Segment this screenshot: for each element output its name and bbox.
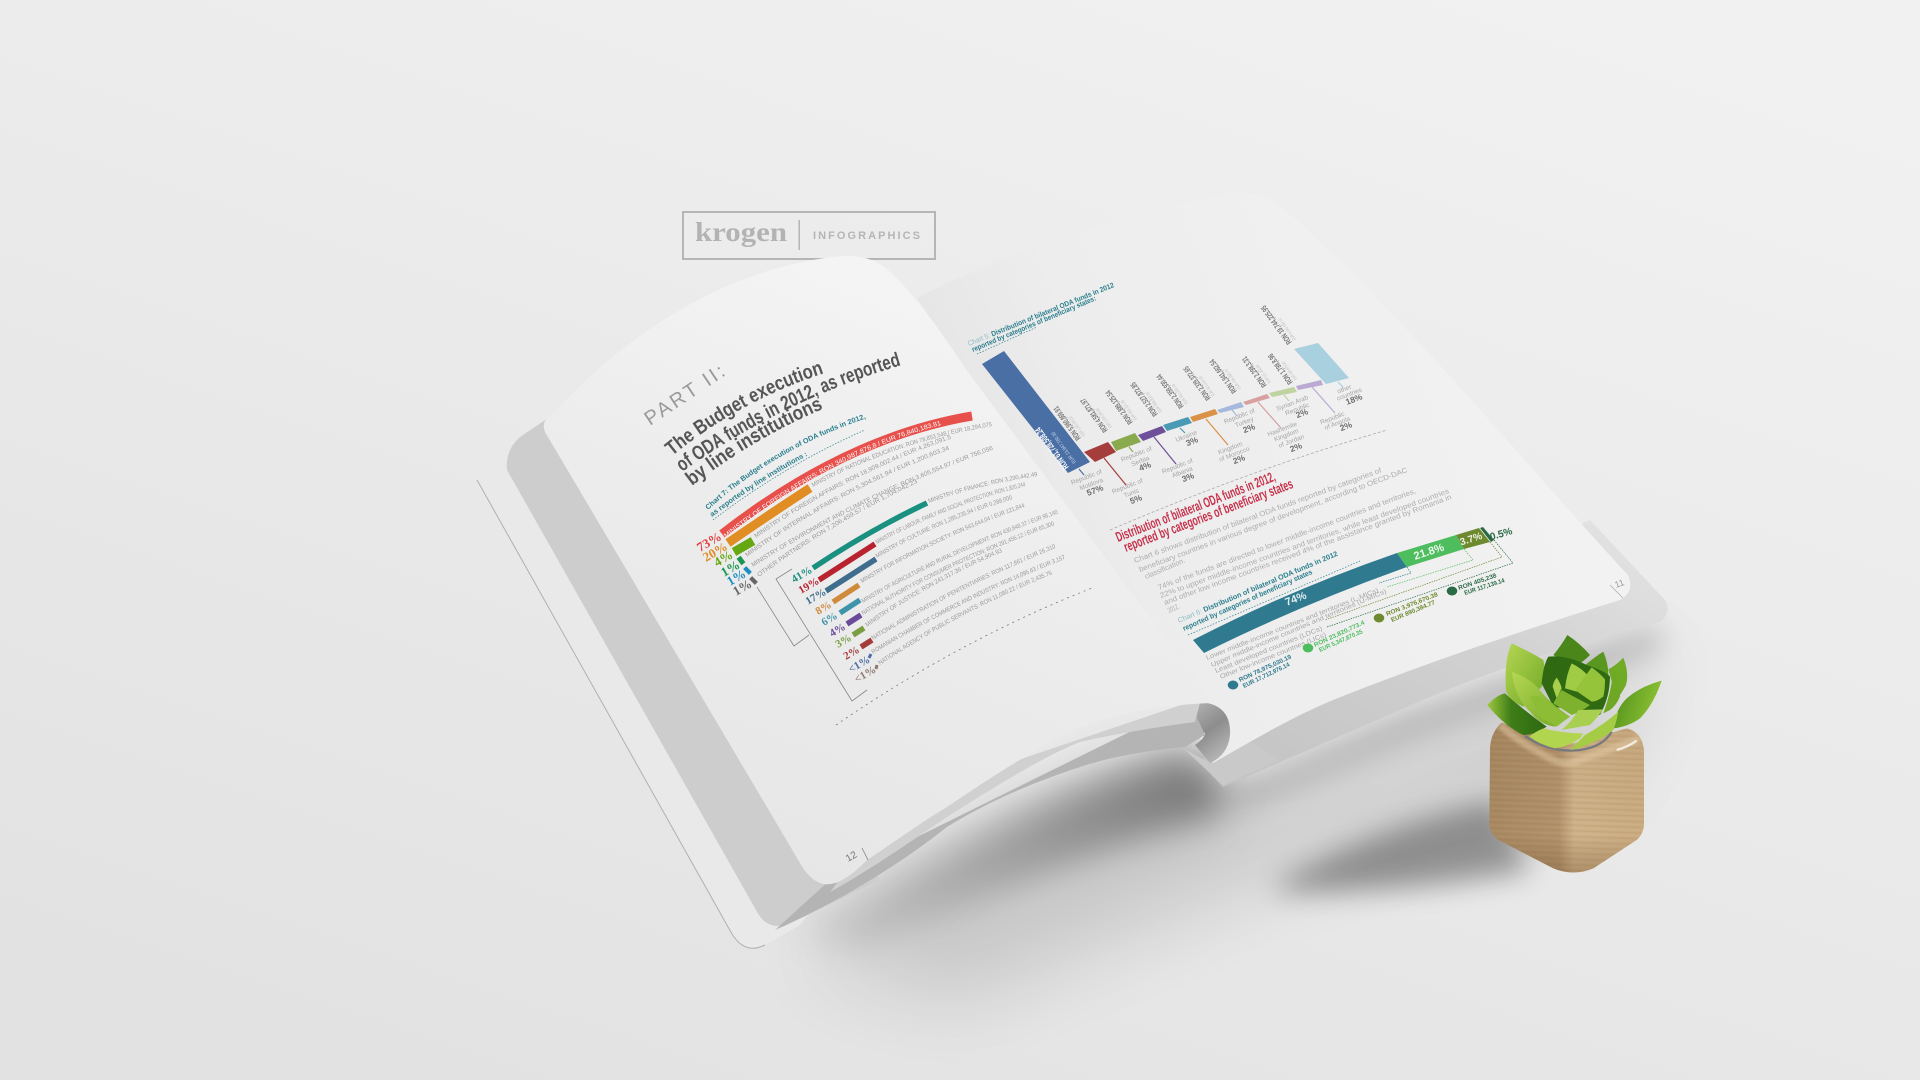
stepped country bar chart: EUR 650,114.30 [1119, 399, 1138, 421]
chart 7 upper bars: 1% [724, 566, 748, 589]
chart 7 caption: as reported by line institutions : [710, 452, 808, 516]
chart 7 upper bars: MINISTRY OF INTERNAL AFFAIRS: RON 5,304,561.94 / EUR 1,200,603.34 [745, 446, 949, 556]
chart 7 lower bars: MINISTRY OF FINANCE: RON 3,290,442.49 [928, 472, 1037, 503]
stepped country bar chart: of Jordan [1278, 433, 1306, 450]
chart 7 upper bars: 20% [700, 539, 730, 565]
body text: and other low income countries received 4% of the assistance granted by Romania in [1163, 492, 1453, 607]
chart 7 upper bars: MINISTRY OF FOREIGN AFFAIRS: RON 18,909,002.44 / EUR 4,263,091.5 [754, 434, 951, 538]
pot [1489, 723, 1644, 872]
chart 7 lower bars: MINISTRY OF JUSTICE: RON 241,317.36 / EUR 54,904.93 [865, 548, 1002, 627]
main heading: by line institutions [684, 400, 822, 486]
logo: krogen infographics [683, 212, 935, 259]
stepped country bar chart [982, 303, 1364, 506]
chart 5 caption: Chart 5: Distribution of bilateral ODA funds in 2012 [966, 280, 1115, 348]
body text: 22% to upper middle-income countries and territories, while least developed countries [1159, 486, 1450, 600]
stepped country bar chart: EUR 1,030,225.60 [1094, 407, 1113, 429]
stepped country bar chart: RON 2,527,872.85 [1129, 380, 1160, 418]
page block right [1200, 520, 1668, 787]
chart 7 upper bars [694, 412, 993, 599]
body text [1133, 465, 1453, 615]
gutter curl [1150, 702, 1230, 763]
stepped country bar chart: of Angola [1324, 415, 1352, 432]
chart 6 stacked bar: Chart 6: Distribution of bilateral ODA funds in 2012 [1176, 549, 1339, 625]
soil ring [1525, 732, 1612, 751]
stepped country bar chart: 2% [1338, 419, 1354, 433]
chart 6 stacked bar: reported by categories of beneficiary states [1181, 567, 1314, 633]
book shadow [790, 625, 1660, 1000]
underside pages light strip [830, 702, 1200, 892]
chart 7 caption: Chart 7: The Budget execution of ODA funds in 2012, [706, 414, 866, 509]
stepped country bar chart: EUR 13,847,760.30 [1050, 430, 1078, 464]
chart 7 upper bars: MINISTRY OF ENVIRONMENT AND CLIMATE CHANGE: RON 3,605,554.97 / EUR 756,056 [751, 446, 993, 567]
page block left [507, 410, 880, 926]
stepped country bar chart: 2% [1231, 452, 1247, 466]
page number 11: 11 [1613, 577, 1625, 590]
stepped country bar chart: EUR 524,110.20 [1197, 375, 1216, 397]
chart 7 upper bars: MINISTRY OF FOREIGN AFFAIRS: RON 340,987,876.8 / EUR 76,840,183.81 [724, 421, 941, 538]
stepped country bar chart: other [1336, 383, 1353, 396]
chart 7 brackets [757, 569, 867, 701]
chart 6 legend: EUR 117,139.14 [1463, 577, 1506, 597]
stepped country bar chart: RON 2,889,125.54 [1104, 388, 1135, 426]
chart 6 stacked bar [1176, 526, 1514, 653]
body text: 2012. [1166, 602, 1181, 615]
back cover [477, 447, 900, 948]
body text: Chart 6 shows distribution of bilateral ODA funds reported by categories of [1133, 465, 1383, 565]
chart 7 lower bars: <1% [852, 664, 878, 686]
stepped country bar chart: Republic [1284, 402, 1311, 417]
chart 7 upper bars: OTHER PARTNERS: RON 7,206,459.57 / EUR 1,704,042.23 [758, 479, 918, 576]
page number 12: 12 [844, 849, 860, 865]
chart 7 lower bars: MINISTRY OF AGRICULTURE AND RURAL DEVELOPMENT: RON 430,648.37 / EUR 96,140 [861, 510, 1058, 603]
stepped country bar chart: Kingdom [1273, 428, 1300, 443]
chart 6 legend: RON 23,820,773.4 [1313, 619, 1366, 649]
stepped country bar chart: Turkey [1234, 416, 1256, 429]
chart 5 caption: reported by categories of beneficiary states: [970, 294, 1097, 354]
chart 7 lower bars: 8% [814, 599, 834, 618]
chart 6 stacked bar: 21.8% [1412, 542, 1446, 563]
chart 7 lower bars: MINISTRY OF CULTURE: RON 1,285,235.94 / EUR 0,288,000 [875, 495, 1012, 558]
red heading: Distribution of bilateral ODA funds in 2012, [1113, 468, 1277, 545]
chart 6 legend: Lower middle-income countries and territories (L-MICs) [1205, 587, 1380, 662]
chart 7 upper bars: MINISTRY OF NATIONAL EDUCATION: RON 78,853,548 / EUR 18,294,075 [812, 422, 992, 487]
chart 6 legend: EUR 890,384.77 [1390, 599, 1437, 624]
stepped country bar chart: EUR 568,920.10 [1144, 391, 1163, 413]
underside pages dark strip [775, 702, 1205, 930]
stepped country bar chart: EUR 531,005.40 [1170, 383, 1189, 405]
stepped country bar chart: of Morocco [1218, 445, 1251, 464]
stepped country bar chart: Kingdom [1217, 441, 1244, 456]
stepped country bar chart: EUR 4,443,500.10 [1277, 317, 1297, 341]
succulent leaves [1487, 635, 1662, 750]
stepped country bar chart: RON 1,798,8.96 [1266, 351, 1295, 386]
stepped country bar chart: 3% [1180, 470, 1196, 484]
chart 7 lower bars: <1% [846, 654, 872, 676]
chart 7 lower bars: 6% [820, 610, 840, 629]
stepped country bar chart: RON 61,728,508.24 [1033, 425, 1071, 472]
logo: krogen infographics: INFOGRAPHICS [813, 230, 920, 242]
stepped country bar chart: RON 2,329,372.65 [1182, 364, 1213, 402]
chart 7 lower bars: NATIONAL AGENCY OF PUBLIC SERVANTS: RON 11,080.22 / EUR 2,435.76 [878, 570, 1052, 665]
chart 7 lower bars: NATIONAL ADMINISTRATION OF PENITENTIARIES: RON 117,861 / EUR 26,310 [871, 544, 1056, 640]
chart 7 lower bars: 17% [804, 586, 829, 608]
chart 6 legend: EUR 5,347,870.35 [1318, 628, 1364, 654]
chart 6 stacked bar: 74% [1283, 590, 1309, 609]
stepped country bar chart: Ukraine [1175, 429, 1199, 444]
chart 7 lower bars [790, 472, 1064, 686]
red heading [1113, 468, 1295, 555]
stepped country bar chart: RON 2,298,3.31 [1240, 354, 1269, 389]
stepped country bar chart: EUR 517,300.80 [1255, 363, 1272, 384]
chart 6 legend: Other low-income countries (LICs) [1219, 632, 1327, 681]
stepped country bar chart: EUR 1,337,440.50 [1067, 415, 1086, 437]
body text: beneficiary countries in various degree of development, according to OECD-DAC [1138, 465, 1409, 574]
stepped country bar chart: Republic of [1070, 468, 1103, 487]
stepped country bar chart: 2% [1241, 421, 1257, 435]
body text: 74% of the funds are directed to lower middle-income countries and territories, [1157, 486, 1417, 592]
plant shadow [1275, 800, 1530, 891]
stepped country bar chart: 18% [1344, 391, 1364, 407]
stepped country bar chart: Republic of [1161, 457, 1194, 476]
main heading: The Budget execution [664, 364, 823, 454]
page number 12 [844, 848, 868, 865]
logo: krogen infographics: krogen [695, 217, 787, 247]
chart 7 lower bars: MINISTRY FOR INFORMATION SOCIETY: RON 543,644.04 / EUR 121,844 [860, 503, 1024, 583]
chart 7 upper bars: 73% [694, 529, 724, 555]
chart 7 lower bars: 2% [842, 644, 862, 663]
chart 7 lower bars: MINISTRY OF LABOUR, FAMILY AND SOCIAL PROTECTION: RON 1,820,244 [875, 482, 1026, 544]
stepped country bar chart: Republic of [1223, 407, 1256, 426]
left page [544, 256, 1208, 884]
stepped country bar chart: Republic of [1120, 445, 1153, 464]
stepped country bar chart: Tunis [1123, 487, 1141, 500]
stepped country bar chart: Republic of [1111, 477, 1144, 496]
body text: classification. [1143, 556, 1186, 581]
plant in wooden pot [1487, 635, 1662, 872]
chart 7 lower bars: 4% [828, 621, 848, 640]
stepped country bar chart: Moldova [1079, 477, 1105, 492]
stepped country bar chart: RON 4,581,871.97 [1079, 396, 1110, 434]
chart 6 legend: RON 3,976,670.38 [1385, 591, 1439, 618]
chart 6 legend: EUR 17,712,976.14 [1242, 661, 1291, 690]
part heading: PART II: [641, 361, 729, 430]
stepped country bar chart: Serbia [1130, 455, 1151, 468]
stepped country bar chart: RON 2,359,930.44 [1155, 372, 1186, 410]
chart 6 stacked bar: 3.7% [1459, 531, 1484, 548]
chart 6 legend: Least developed countries (LDCs) [1214, 625, 1323, 675]
stepped country bar chart: countries [1336, 386, 1364, 403]
stepped country bar chart: EUR 436,990.70 [1223, 368, 1242, 390]
chart 7 upper bars: 4% [711, 547, 735, 570]
stepped country bar chart: 5% [1128, 492, 1144, 506]
stepped country bar chart: Albania [1171, 465, 1194, 480]
stepped country bar chart: RON 1,941,662.54 [1208, 357, 1239, 395]
chart 7 lower bars: NATIONAL AUTHORITY FOR CONSUMER PROTECTION: RON 291,456.12 / EUR 65,300 [861, 522, 1054, 615]
chart 7 upper bars: 1% [730, 576, 754, 599]
stepped country bar chart: Hashemite [1267, 421, 1299, 438]
stepped country bar chart: RON 5,960,869.91 [1052, 404, 1083, 442]
back cover edge [477, 480, 765, 948]
chart 7 lower bars: ROMANIAN CHAMBER OF COMMERCE AND INDUSTRY: RON 14,095.63 / EUR 3,157 [871, 555, 1064, 654]
stepped country bar chart: RON 19,744,225.95 [1259, 303, 1294, 346]
chart 6 legend: Upper middle-income countries and territories (U-MICs) [1210, 588, 1388, 669]
red heading: reported by categories of beneficiary states [1121, 475, 1295, 555]
book [476, 256, 1668, 949]
main heading: of ODA funds in 2012, as reported [678, 352, 900, 470]
chart 6 stacked bar: 0.5% [1489, 526, 1514, 543]
stepped country bar chart: 3% [1184, 434, 1200, 448]
stepped country bar chart: Republic [1319, 411, 1346, 426]
wedge at spine [1183, 735, 1280, 785]
stepped country bar chart: Syrian Arab [1276, 394, 1310, 413]
chart 6 legend: RON 78,975,030.19 [1238, 653, 1293, 684]
chart 7 lower bars: 3% [834, 632, 854, 651]
stepped country bar chart: 4% [1137, 459, 1153, 473]
chart 7 lower bars: 41% [790, 564, 815, 586]
stepped country bar chart: 2% [1288, 440, 1304, 454]
chart 6 legend: RON 405,238 [1457, 572, 1498, 592]
chart 6 legend [1205, 572, 1506, 690]
page number 11 [1610, 577, 1625, 598]
chart 7 upper bars: 1% [718, 557, 742, 580]
right page [917, 193, 1630, 763]
stepped country bar chart: 57% [1085, 482, 1105, 498]
stepped country bar chart: EUR 404,870.30 [1281, 360, 1298, 381]
chart 7 lower bars: 19% [796, 575, 822, 597]
stepped country bar chart: 2% [1294, 406, 1310, 420]
